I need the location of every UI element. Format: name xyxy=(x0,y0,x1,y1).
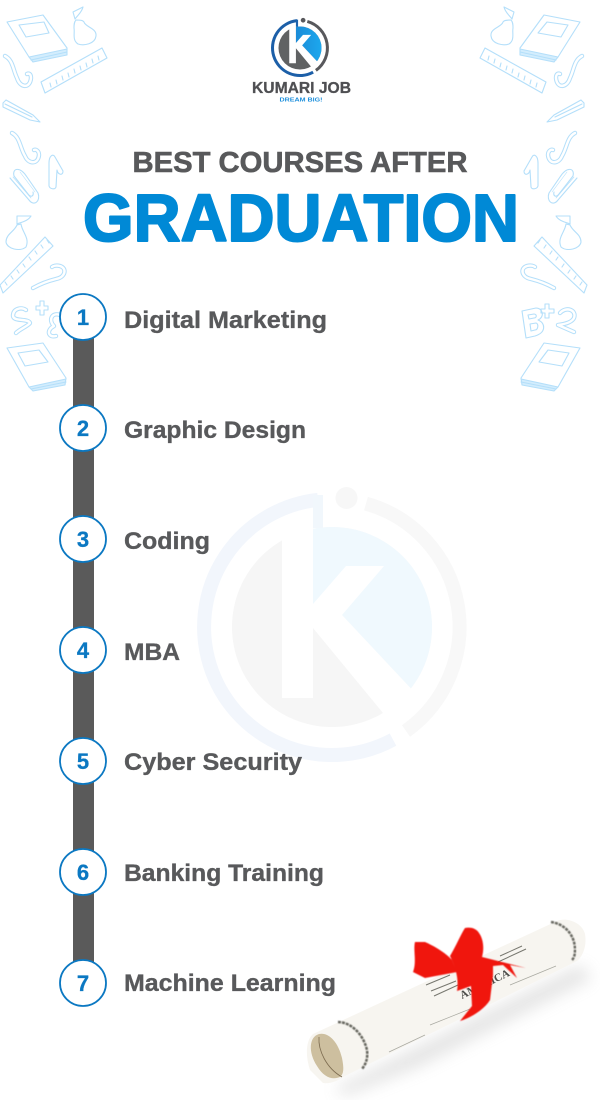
right border pattern xyxy=(551,922,575,960)
logo xyxy=(252,18,351,104)
logo emblem xyxy=(272,18,327,76)
icon: pear xyxy=(491,7,514,45)
step 4: 4 xyxy=(77,638,90,663)
icon: pencil xyxy=(547,100,584,122)
left border pattern xyxy=(338,1022,367,1069)
icon: ruler xyxy=(0,237,53,293)
step 6 xyxy=(60,849,324,895)
icon: hook xyxy=(33,266,65,288)
step 1 xyxy=(60,294,327,340)
icon: book xyxy=(520,15,580,62)
step 7: 7 xyxy=(77,971,89,996)
icon: pencil xyxy=(3,100,40,122)
scroll body xyxy=(307,920,586,1083)
printed lines xyxy=(426,946,526,996)
step 5: 5 xyxy=(77,749,89,774)
icon: letter b xyxy=(522,308,544,338)
timeline bar xyxy=(73,330,94,970)
doodles left xyxy=(0,7,107,391)
step 4 xyxy=(60,627,180,673)
icon: number one xyxy=(524,155,538,189)
title line one: BEST COURSES AFTER xyxy=(132,147,468,179)
icon: plus xyxy=(541,304,554,318)
icon: ruler xyxy=(480,48,546,93)
icon: book xyxy=(7,343,66,391)
logo wordmark: KUMARI JOB xyxy=(252,80,351,97)
icon: pear xyxy=(73,7,96,45)
step 5 xyxy=(60,738,302,784)
icon: hook xyxy=(556,56,582,86)
logo tagline: DREAM BIG! xyxy=(280,98,323,104)
step 3: Coding xyxy=(124,528,210,555)
scroll opening xyxy=(311,1034,343,1078)
step 4: MBA xyxy=(124,639,180,666)
icon: plus xyxy=(36,301,48,315)
diploma scroll xyxy=(307,920,592,1096)
icon: hook xyxy=(12,133,39,162)
step 2: 2 xyxy=(77,416,89,441)
icon: book xyxy=(521,343,580,391)
icon: number eight xyxy=(49,314,60,336)
step 5: Cyber Security xyxy=(124,749,302,776)
icon: hook xyxy=(5,56,31,86)
icon: ruler xyxy=(534,237,587,293)
step 2: Graphic Design xyxy=(124,417,306,444)
step 7: Machine Learning xyxy=(124,970,336,997)
step 2 xyxy=(60,405,306,451)
icon: hook xyxy=(548,133,575,162)
timeline xyxy=(60,294,336,1006)
mirrored doodles xyxy=(480,7,587,391)
shadow xyxy=(335,965,592,1096)
icon: ruler xyxy=(41,48,107,93)
step 3: 3 xyxy=(77,527,89,552)
step 6: 6 xyxy=(77,860,89,885)
watermark logo xyxy=(204,487,460,755)
icon: letter s xyxy=(13,308,30,333)
step 1: Digital Marketing xyxy=(124,307,327,334)
icon: pear xyxy=(6,216,31,249)
icon: paperclip xyxy=(548,169,577,203)
icon: pear xyxy=(556,216,581,249)
red ribbon xyxy=(413,928,526,1021)
doodles right xyxy=(480,7,587,391)
signature lines xyxy=(389,966,556,1052)
icon: hook xyxy=(522,266,554,288)
step 3 xyxy=(60,516,210,562)
icon: book xyxy=(7,15,67,62)
icon: paperclip xyxy=(10,169,39,203)
step 6: Banking Training xyxy=(124,860,324,887)
icon: number two xyxy=(558,309,575,332)
step 7 xyxy=(60,960,336,1006)
title line two: GRADUATION xyxy=(83,181,519,256)
icon: number one xyxy=(49,155,63,189)
step 1: 1 xyxy=(77,305,89,330)
diploma text: AMERICA xyxy=(458,967,512,1002)
